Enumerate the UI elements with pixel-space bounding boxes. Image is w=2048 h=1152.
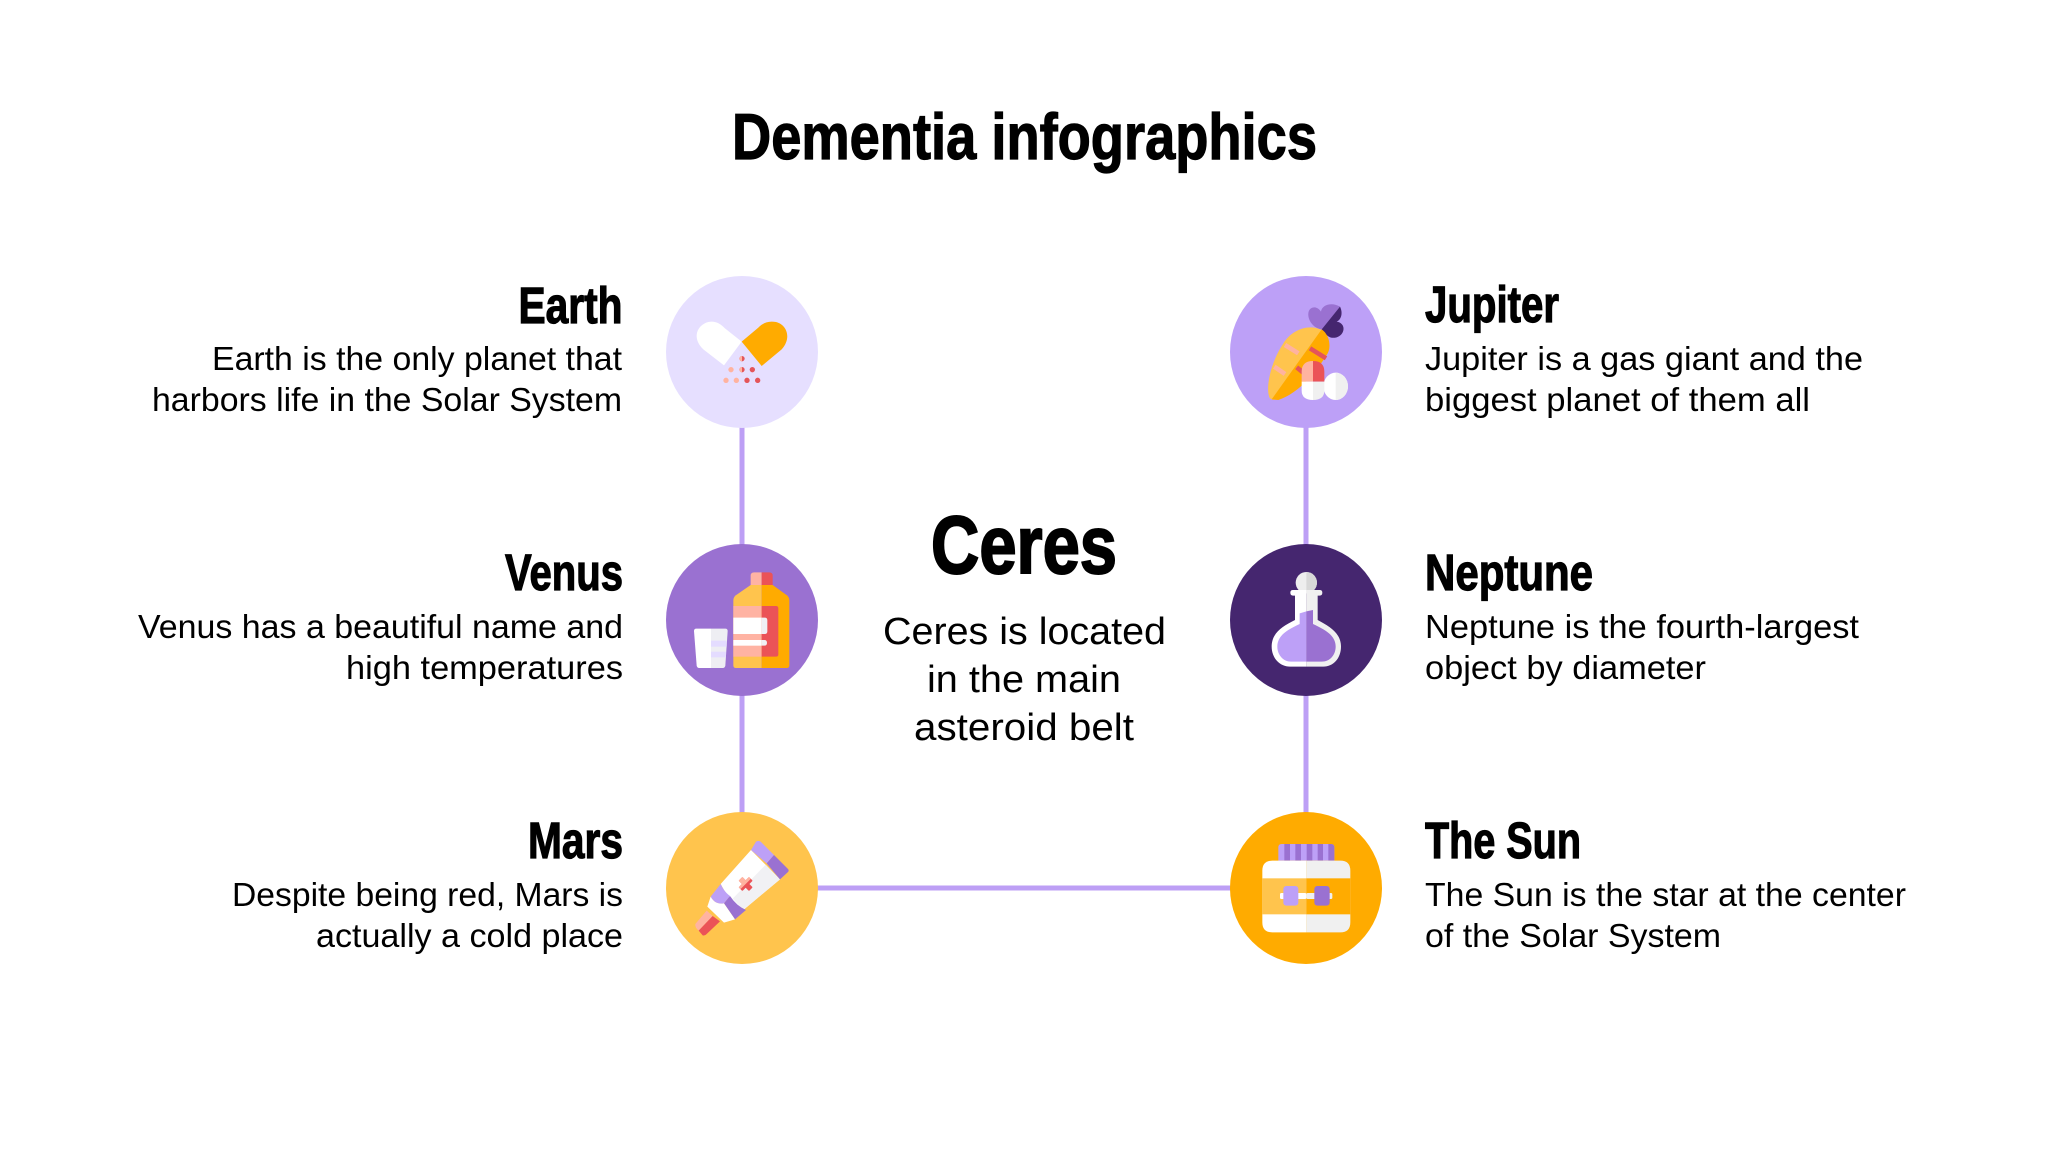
center block: Ceres [883, 500, 1166, 749]
panel: Venus [138, 544, 818, 696]
Jupiter heading: Jupiter [1425, 276, 1559, 333]
center text: asteroid belt [914, 707, 1134, 749]
The Sun text: of the Solar System [1425, 918, 1721, 955]
Venus text [138, 609, 623, 687]
Venus heading: Venus [505, 544, 623, 601]
Neptune heading: Neptune [1425, 544, 1593, 601]
panel: The Sun [1230, 812, 1906, 964]
center text: in the main [927, 659, 1121, 701]
Neptune text: object by diameter [1425, 650, 1706, 687]
icon: supplement jar [1230, 812, 1382, 964]
The Sun heading: The Sun [1425, 812, 1581, 869]
connector lines [742, 352, 1306, 888]
Mars text: actually a cold place [316, 918, 623, 955]
Neptune text [1425, 609, 1860, 687]
center text: Ceres is located [883, 611, 1166, 653]
Earth text [152, 341, 623, 419]
Mars heading: Mars [528, 812, 623, 869]
Jupiter text: biggest planet of them all [1425, 382, 1810, 419]
The Sun text: The Sun is the star at the center [1425, 877, 1906, 914]
icon: pill capsule [666, 276, 818, 428]
center heading: Ceres [931, 500, 1117, 591]
The Sun text [1425, 877, 1906, 955]
Mars text [232, 877, 623, 955]
Jupiter text: Jupiter is a gas giant and the [1425, 341, 1863, 378]
icon: medicine bottle and glass [666, 544, 818, 696]
Venus text: high temperatures [346, 650, 623, 687]
Neptune text: Neptune is the fourth-largest [1425, 609, 1860, 646]
icon: flask [1230, 544, 1382, 696]
Earth text: Earth is the only planet that [212, 341, 623, 378]
panel: Mars [232, 812, 818, 964]
Earth heading: Earth [518, 277, 622, 334]
icon: ointment tube [666, 812, 818, 964]
icon: carrot and pills [1230, 276, 1382, 428]
Jupiter text [1425, 341, 1863, 419]
panel: Neptune [1230, 544, 1860, 696]
center text [883, 611, 1166, 749]
Mars text: Despite being red, Mars is [232, 877, 623, 914]
panel: Jupiter [1230, 276, 1863, 428]
Venus text: Venus has a beautiful name and [138, 609, 623, 646]
panel: Earth [152, 276, 818, 428]
title: Dementia infographics [732, 100, 1317, 173]
Earth text: harbors life in the Solar System [152, 382, 622, 419]
